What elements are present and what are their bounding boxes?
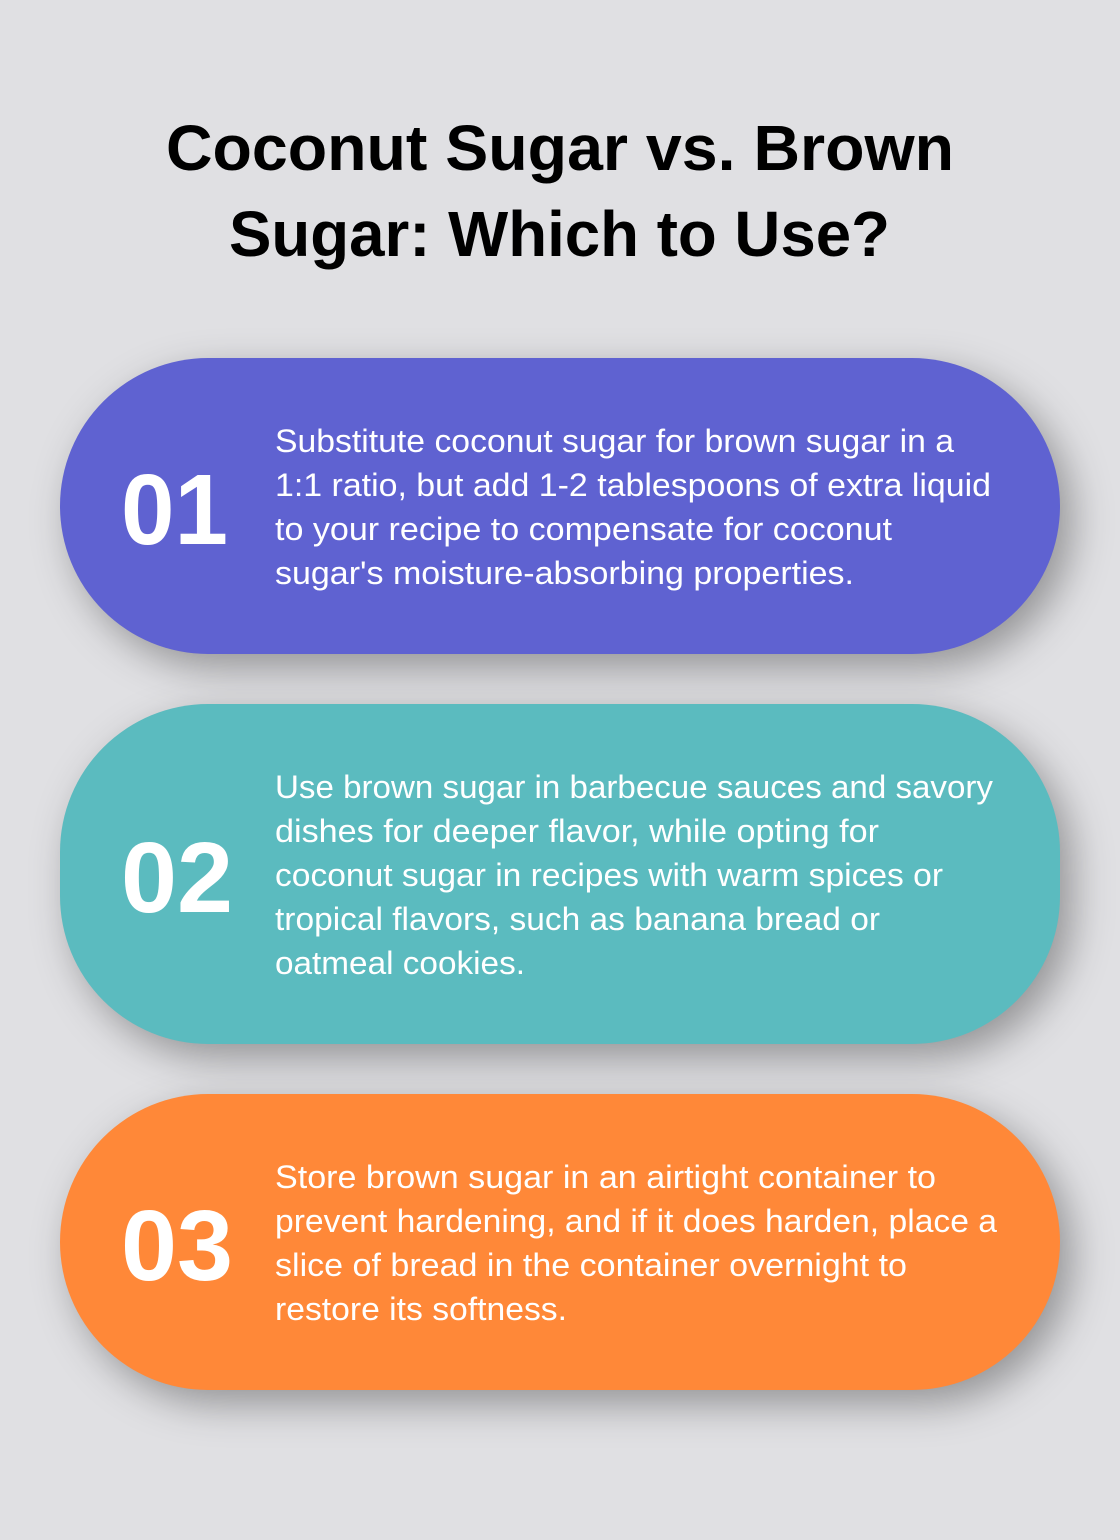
panel: step 03 [60, 1094, 1072, 1404]
panel: step 02 [60, 704, 1072, 1058]
number 01: 01 [121, 454, 228, 566]
text 02 [275, 769, 994, 981]
text 02: dishes for deeper flavor, while opting for [275, 813, 879, 849]
text 03 [275, 1159, 998, 1327]
text 02: oatmeal cookies. [275, 945, 525, 981]
panel: step 01 [60, 358, 1072, 668]
text 02: Use brown sugar in barbecue sauces and savory [275, 769, 994, 805]
title: Coconut Sugar vs. Brown [166, 112, 954, 184]
text 01: Substitute coconut sugar for brown sugar in a [275, 423, 955, 459]
text 03: Store brown sugar in an airtight container to [275, 1159, 936, 1195]
text 02: tropical flavors, such as banana bread or [275, 901, 880, 937]
text 03: slice of bread in the container overnight to [275, 1247, 907, 1283]
number 03: 03 [121, 1190, 233, 1302]
panel 03 shadow [72, 1108, 1072, 1404]
text 03: prevent hardening, and if it does harden, place a [275, 1203, 998, 1239]
panel 03 pill [60, 1094, 1060, 1390]
title: Sugar: Which to Use? [229, 198, 890, 270]
title [166, 112, 954, 270]
text 02: coconut sugar in recipes with warm spices or [275, 857, 943, 893]
panel 02 pill [60, 704, 1060, 1044]
text 01: 1:1 ratio, but add 1-2 tablespoons of extra liquid [275, 467, 991, 503]
panel 01 shadow [72, 372, 1072, 668]
number 02: 02 [121, 822, 233, 934]
text 03: restore its softness. [275, 1291, 567, 1327]
panel 01 pill [60, 358, 1060, 654]
text 01 [275, 423, 991, 591]
text 01: sugar's moisture-absorbing properties. [275, 555, 854, 591]
text 01: to your recipe to compensate for coconut [275, 511, 892, 547]
panel 02 shadow [72, 718, 1072, 1058]
